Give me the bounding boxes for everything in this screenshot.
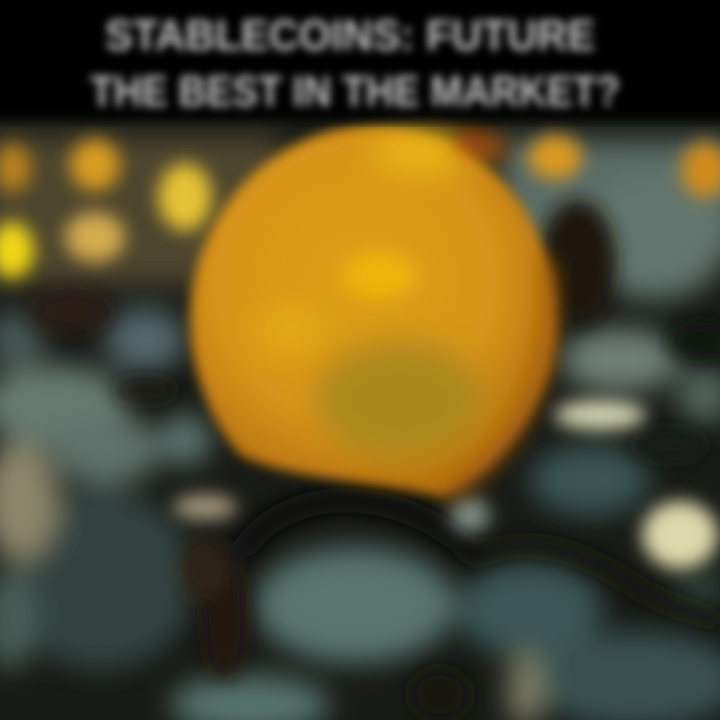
stones lit highlights (173, 400, 718, 569)
dark gaps between stones (32, 200, 720, 720)
title band (0, 0, 720, 120)
title line 1: STABLECOINS: FUTURE (105, 11, 595, 60)
background lights (0, 132, 720, 278)
title line 2: THE BEST IN THE MARKET? (90, 67, 620, 116)
title (90, 11, 620, 116)
icon: gold coin (190, 125, 557, 497)
